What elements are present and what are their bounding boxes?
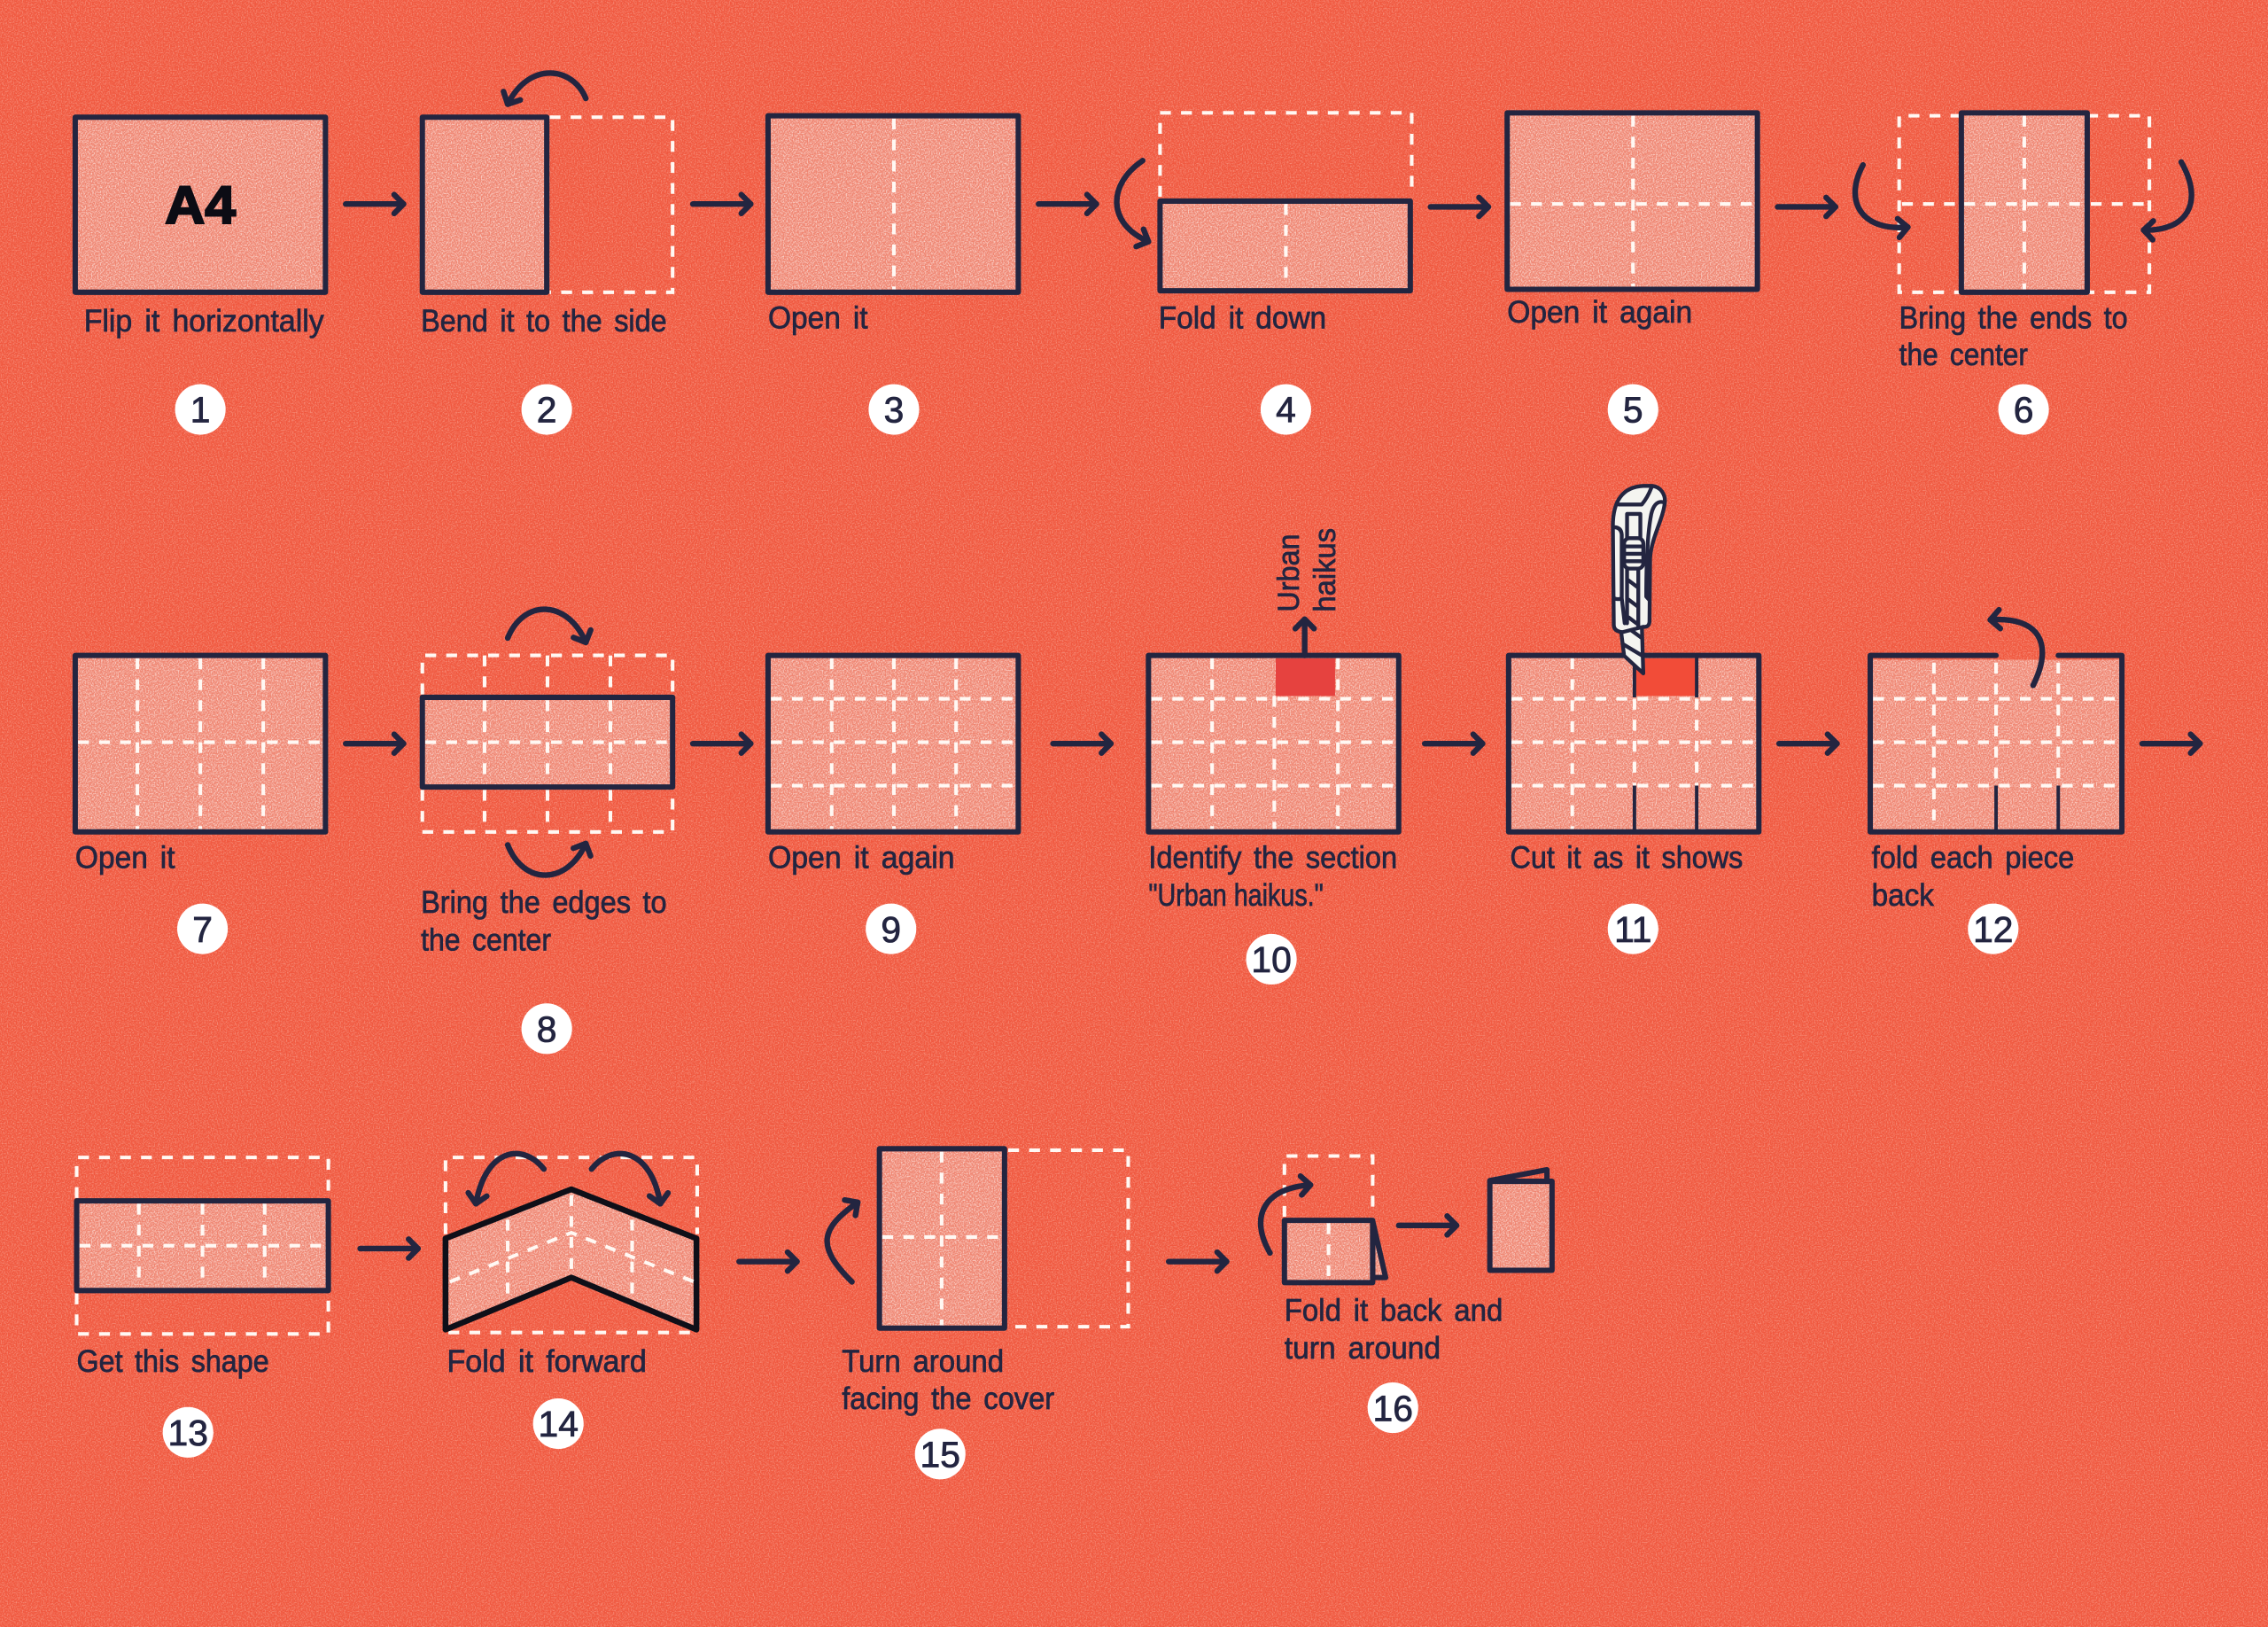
- step 11: cut it: [1509, 486, 1759, 954]
- caption 12: back: [1872, 878, 1934, 913]
- arrow 8 to 9: [693, 742, 750, 745]
- left curved arrow: [1855, 165, 1907, 228]
- caption 15: facing the cover: [842, 1382, 1054, 1416]
- folded sheet: [1160, 201, 1410, 291]
- cut lines: [1996, 786, 2058, 832]
- step 16: fold back and turn around: [1261, 1156, 1552, 1433]
- number 2: [522, 384, 572, 435]
- number 5: 5: [1623, 390, 1643, 431]
- curved arrow: [1117, 160, 1148, 242]
- caption 7: Open it: [75, 841, 175, 876]
- step 9: open it again: [768, 656, 1018, 954]
- highlighted section: [1276, 658, 1335, 696]
- step 8: bring the edges to the center: [421, 610, 672, 1054]
- step 2: bend to the side: [421, 73, 672, 435]
- number 6: [1999, 384, 2049, 435]
- right curved arrow: [592, 1154, 660, 1203]
- caption 10: Identify the section: [1148, 841, 1397, 876]
- number 14: [533, 1398, 584, 1449]
- number 2: 2: [537, 390, 556, 431]
- arrow to section title: [1303, 619, 1307, 656]
- cut lines: [1635, 656, 1697, 832]
- caption 16: Fold it back and: [1285, 1294, 1503, 1328]
- arrow 14 to 15: [739, 1260, 797, 1264]
- folded sheet: [423, 117, 547, 292]
- arrow 10 to 11: [1425, 742, 1482, 745]
- caption 15: [842, 1344, 1054, 1416]
- rotated title: Urban: [1272, 533, 1306, 612]
- number 6: 6: [2014, 390, 2033, 431]
- section to cut: [1636, 658, 1695, 696]
- chevron sheet: [446, 1189, 696, 1329]
- curved arrow: [508, 73, 586, 105]
- arrow to finished booklet: [1399, 1224, 1456, 1227]
- number 7: [177, 904, 228, 954]
- caption 8: Bring the edges to: [421, 885, 667, 920]
- folded sheet: [1961, 113, 2087, 292]
- step 4: fold it down: [1117, 113, 1411, 435]
- step 10: identify the section: [1148, 528, 1399, 985]
- step 6: bring the ends to the center: [1855, 113, 2192, 435]
- caption 2: Bend it to the side: [421, 304, 667, 339]
- folded sheet: [77, 1201, 329, 1290]
- number 4: [1261, 384, 1311, 435]
- step 7: open it: [75, 656, 325, 954]
- caption 12: [1872, 841, 2074, 913]
- arrow 12 onward: [2142, 742, 2200, 745]
- number 5: [1608, 384, 1658, 435]
- step 13: get this shape: [77, 1157, 329, 1458]
- caption 16: turn around: [1285, 1331, 1441, 1366]
- number 9: 9: [881, 909, 901, 950]
- arrow 9 to 10: [1053, 742, 1111, 745]
- step 15: turn around: [827, 1148, 1128, 1479]
- arrow 13 to 14: [361, 1247, 418, 1250]
- step 1: A4 sheet: [75, 117, 325, 435]
- caption 4: Fold it down: [1159, 301, 1326, 336]
- number 8: [522, 1003, 572, 1054]
- left curved arrow: [476, 1154, 544, 1203]
- caption 5: Open it again: [1507, 295, 1692, 330]
- caption 6: [1899, 301, 2128, 372]
- caption 12: fold each piece: [1872, 841, 2074, 876]
- rotated title: haikus: [1309, 528, 1342, 612]
- number 13: 13: [168, 1413, 208, 1453]
- right curved arrow: [2144, 162, 2192, 230]
- arrow 4 to 5: [1431, 206, 1488, 208]
- number 10: 10: [1251, 939, 1292, 980]
- arrow 5 to 6: [1778, 206, 1836, 208]
- number 12: 12: [1973, 909, 2013, 950]
- arrow 3 to 4: [1038, 202, 1097, 206]
- caption 15: Turn around: [842, 1344, 1004, 1379]
- number 4: 4: [1276, 390, 1296, 431]
- number 1: 1: [190, 390, 210, 431]
- folded sheet: [423, 697, 672, 787]
- number 3: [868, 384, 920, 435]
- number 7: 7: [192, 909, 213, 950]
- arrow 2 to 3: [693, 202, 750, 206]
- caption 13: Get this shape: [77, 1344, 269, 1379]
- step 12: fold each piece back: [1870, 619, 2122, 954]
- caption 6: the center: [1899, 338, 2028, 372]
- number 15: 15: [920, 1435, 960, 1475]
- step 3: open it: [768, 116, 1018, 435]
- arrow 11 to 12: [1779, 742, 1837, 745]
- number 12: [1968, 904, 2018, 954]
- A4 label: A4: [165, 175, 237, 235]
- caption 1: Flip it horizontally: [84, 304, 324, 339]
- number 14: 14: [539, 1404, 579, 1444]
- caption 10: "Urban haikus.": [1148, 878, 1324, 913]
- step 14: fold it forward: [446, 1154, 697, 1449]
- number 10: [1247, 934, 1297, 985]
- folded sheet: [880, 1148, 1005, 1328]
- bottom curved arrow: [508, 844, 586, 876]
- caption 8: [421, 885, 667, 958]
- finished booklet: [1490, 1170, 1552, 1270]
- caption 14: Fold it forward: [447, 1344, 647, 1379]
- number 1: [175, 384, 226, 435]
- number 13: [163, 1407, 214, 1458]
- caption 6: Bring the ends to: [1899, 301, 2128, 336]
- curved arrow: [1991, 619, 2042, 685]
- folded sheet: [1285, 1220, 1372, 1282]
- caption 8: the center: [421, 923, 551, 958]
- number 8: 8: [537, 1009, 556, 1050]
- curved arrow: [827, 1203, 858, 1282]
- number 16: 16: [1373, 1388, 1413, 1428]
- arrow 7 to 8: [346, 742, 404, 745]
- step 5: open it again: [1507, 113, 1758, 435]
- caption 9: Open it again: [768, 841, 955, 876]
- arrow 15 to 16: [1169, 1260, 1226, 1264]
- icon: utility knife: [1613, 486, 1665, 673]
- number 3: 3: [884, 390, 904, 431]
- number 11: 11: [1614, 909, 1651, 950]
- number 15: [915, 1428, 966, 1479]
- number 9: [866, 904, 916, 954]
- caption 16: [1285, 1294, 1503, 1366]
- top curved arrow: [508, 610, 586, 642]
- rotated title: [1272, 528, 1342, 612]
- caption 3: Open it: [768, 301, 868, 336]
- curved arrow: [1261, 1185, 1310, 1253]
- number 16: [1368, 1382, 1418, 1433]
- caption 11: Cut it as it shows: [1510, 841, 1743, 876]
- arrow 1 to 2: [346, 202, 404, 206]
- back flap: [1372, 1221, 1386, 1278]
- caption 10: [1148, 841, 1397, 913]
- number 11: [1608, 904, 1658, 954]
